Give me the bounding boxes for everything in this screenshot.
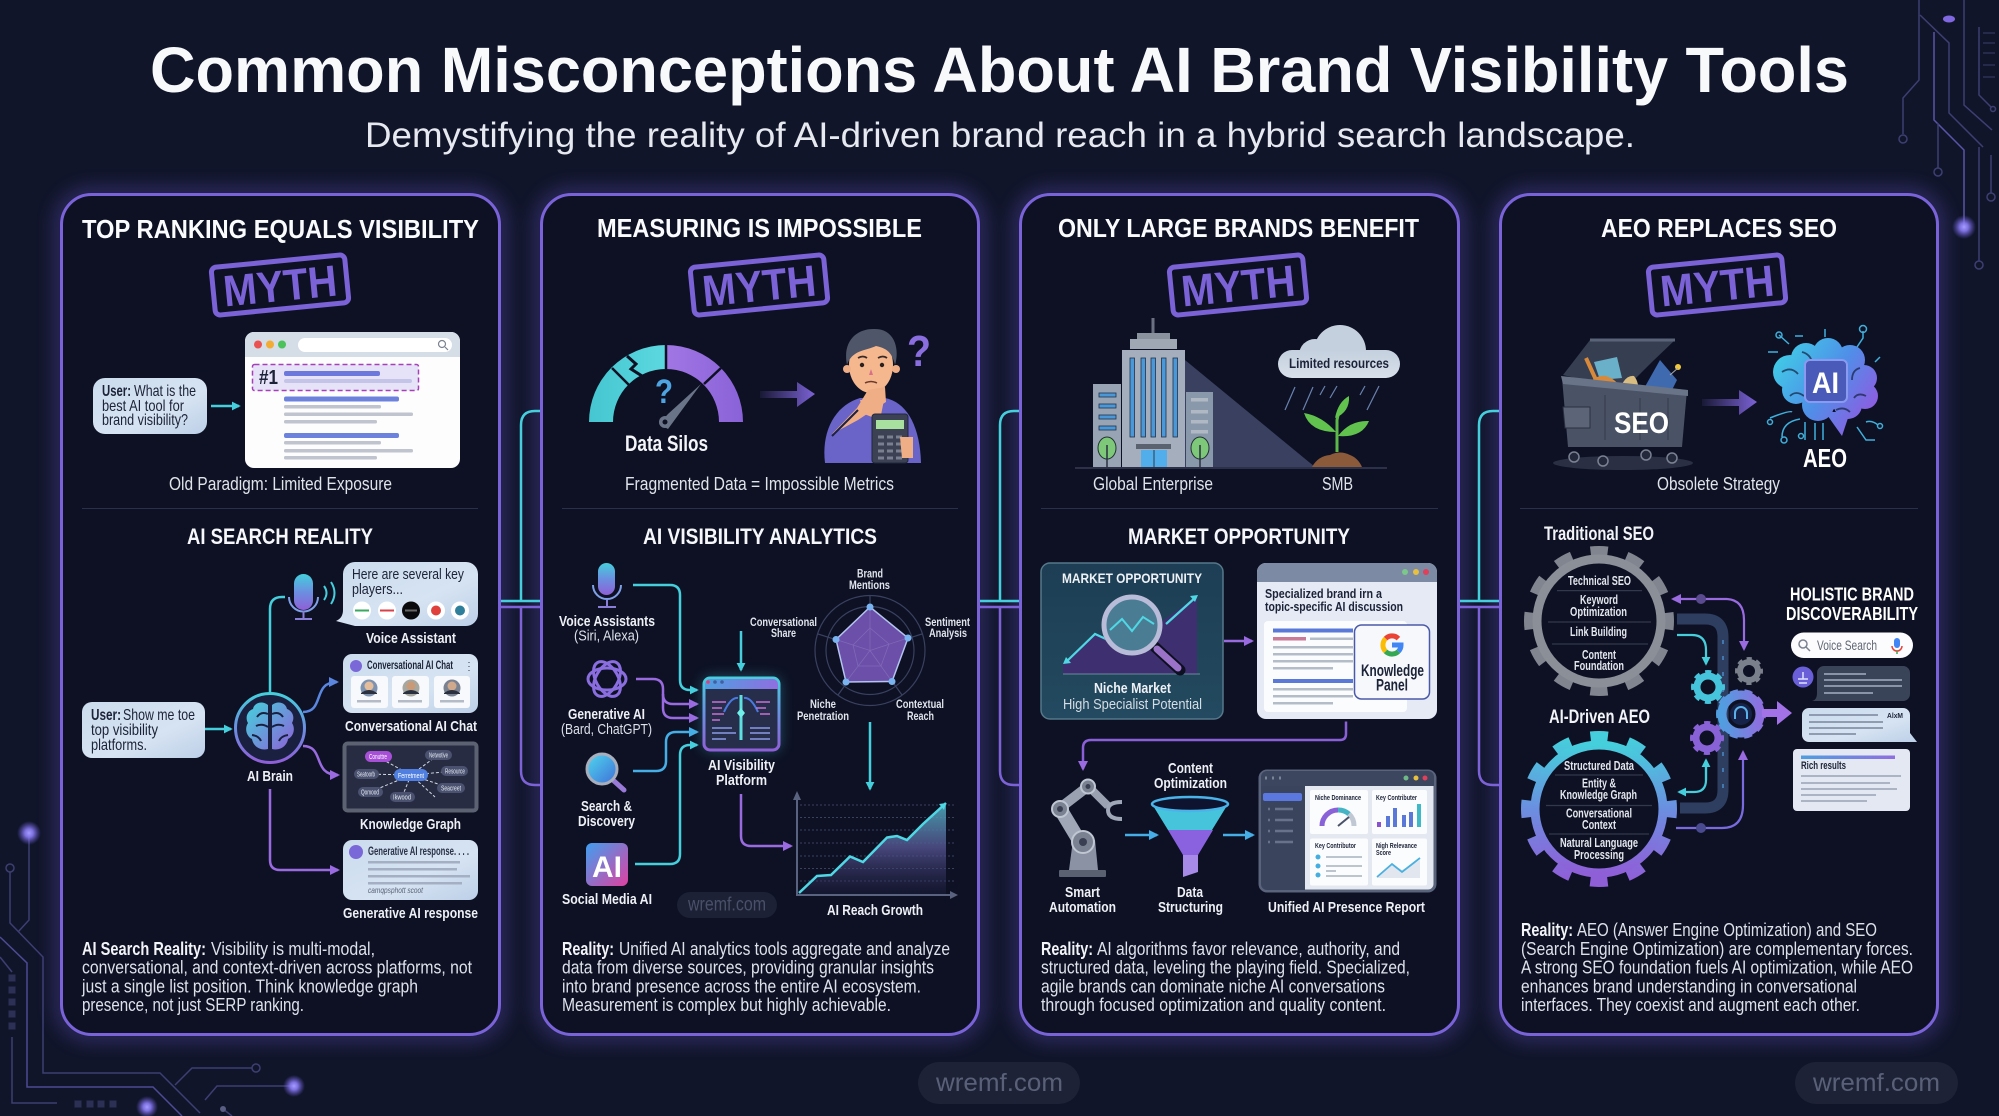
label: Discovery xyxy=(578,813,636,830)
label: Smart xyxy=(1065,884,1100,901)
rain xyxy=(1285,386,1379,410)
gear: AI-driven AEO xyxy=(1528,738,1670,880)
knowledge graph card: Ferretment xyxy=(398,773,424,780)
SEO dumpster: SEO xyxy=(1614,407,1669,440)
reality text: AI Search Reality: xyxy=(82,939,206,959)
small gears xyxy=(1692,659,1764,753)
gear: AI-driven AEO: Natural Language xyxy=(1560,835,1638,850)
radar labels: Share xyxy=(771,626,796,640)
AI discussion browser card xyxy=(1257,563,1437,719)
reality text: enhances brand understanding in conversational xyxy=(1521,976,1857,996)
heading: AEO REPLACES SEO xyxy=(1601,213,1837,243)
arrow xyxy=(1224,640,1252,642)
microphone icon xyxy=(593,563,621,607)
knowledge graph card: Ikwood xyxy=(393,794,411,802)
knowledge graph card: Conuttre xyxy=(369,754,387,761)
reality text: Reality: xyxy=(1521,920,1573,940)
knowledge graph card: Seacreet xyxy=(441,786,461,792)
connector to robot xyxy=(1083,722,1346,769)
robot arm xyxy=(1052,780,1122,877)
myth stamp: MYTH xyxy=(221,257,339,316)
sub heading: AI VISIBILITY ANALYTICS xyxy=(643,524,877,549)
arrow xyxy=(211,405,239,407)
heading: traditional SEO: Traditional SEO xyxy=(1544,524,1654,545)
reality text: into brand presence across the entire AI ecosystem. xyxy=(562,976,921,996)
label: Conversational AI Chat xyxy=(345,718,477,735)
conversational chat card xyxy=(343,654,478,713)
knowledge graph card: Qomood xyxy=(361,790,379,796)
panel: only large brands benefit xyxy=(1020,194,1458,1034)
arrows xyxy=(1125,834,1253,836)
assistant icon xyxy=(1792,666,1814,688)
gear: AI-driven AEO: Processing xyxy=(1574,847,1624,862)
confused person with calculator: ? xyxy=(907,327,931,376)
generative response card: Generative AI response. . . . xyxy=(368,844,469,858)
label xyxy=(1049,884,1116,916)
background circuit: top right xyxy=(1899,0,1996,269)
reality text: interfaces. They coexist and augment each other. xyxy=(1521,995,1860,1015)
SEO dumpster xyxy=(1553,340,1693,470)
user query bubble: Show me toe xyxy=(123,707,195,724)
label: (Siri, Alexa) xyxy=(574,628,639,644)
user query bubble xyxy=(82,702,205,758)
heading: holistic brand discoverability: DISCOVERABILITY xyxy=(1786,604,1918,624)
connector: panel 2 to 3 xyxy=(979,411,1020,785)
social AI tile xyxy=(586,843,628,886)
user bubble xyxy=(93,378,207,434)
radar labels: Contextual xyxy=(896,697,944,711)
reality text: data from diverse sources, providing granular insights xyxy=(562,958,934,978)
label: Voice Assistants xyxy=(559,613,655,630)
watermark pill: right xyxy=(1795,1062,1958,1104)
gear: traditional SEO: Content xyxy=(1582,647,1616,662)
label: Content xyxy=(1168,760,1213,777)
reality text: through focused optimization and quality content. xyxy=(1041,995,1386,1015)
reality text: AEO (Answer Engine Optimization) and SEO xyxy=(1577,920,1877,940)
funnel xyxy=(1152,797,1228,877)
label: AI Reach Growth xyxy=(827,902,923,919)
gear: traditional SEO: Keyword xyxy=(1580,592,1618,607)
label: AI Visibility xyxy=(708,757,776,774)
reality text xyxy=(1521,920,1913,1015)
confused person with calculator xyxy=(824,327,931,463)
label xyxy=(708,757,776,789)
AI discussion browser card: Specialized brand irn a xyxy=(1265,586,1383,601)
niche market card: Niche Market xyxy=(1094,680,1171,697)
watermark pill: center xyxy=(918,1062,1080,1104)
radar labels: Analysis xyxy=(929,626,967,640)
unified report dashboard: Niche Dominance xyxy=(1315,795,1361,802)
knowledge graph card: Seatoorb xyxy=(357,772,375,778)
large purple arrow xyxy=(1762,701,1792,725)
radar chart xyxy=(815,595,925,706)
user bubble: best AI tool for xyxy=(102,398,185,415)
label: (Bard, ChatGPT) xyxy=(561,721,652,738)
flow arrows xyxy=(1673,594,1744,833)
panel: measuring is impossible xyxy=(542,194,978,1034)
generative response card xyxy=(343,840,478,900)
light response bubble: AlxM xyxy=(1887,713,1903,720)
caption: Old Paradigm: Limited Exposure xyxy=(169,474,392,494)
radar labels: Mentions xyxy=(849,578,890,592)
background circuit: bottom left xyxy=(0,821,305,1116)
reality text: just a single list position. Think knowledge graph xyxy=(81,976,418,996)
AEO brain with AI chip xyxy=(1768,326,1882,443)
reality text: conversational, and context-driven across platforms, not xyxy=(82,958,472,978)
label: Social Media AI xyxy=(562,891,652,908)
niche market card: High Specialist Potential xyxy=(1063,696,1202,713)
connecting track xyxy=(1677,619,1723,808)
AI brain icon xyxy=(236,694,304,762)
label: Platform xyxy=(716,772,767,789)
gear: AI-driven AEO: Structured Data xyxy=(1564,758,1635,773)
reality text xyxy=(562,939,950,1015)
label: Automation xyxy=(1049,899,1116,916)
gear: AI-driven AEO: Context xyxy=(1582,817,1616,832)
label: AEO xyxy=(1803,443,1847,473)
dark response bubble xyxy=(1812,666,1910,701)
reality text xyxy=(1041,939,1410,1015)
user bubble: What is the xyxy=(134,383,196,400)
niche market card xyxy=(1041,563,1223,719)
gear: AI-driven AEO: Entity & xyxy=(1582,776,1616,790)
reality text: Unified AI analytics tools aggregate and analyze xyxy=(619,939,950,959)
niche market card: MARKET OPPORTUNITY xyxy=(1062,570,1203,586)
label xyxy=(1158,884,1223,916)
reality text: Measurement is complex but highly achievable. xyxy=(562,995,891,1015)
sprout xyxy=(1304,396,1369,467)
reality text: presence, not just SERP ranking. xyxy=(82,995,304,1015)
label xyxy=(561,706,652,738)
label: AI Brain xyxy=(247,768,293,785)
connector: panel 3 to 4 xyxy=(1459,411,1500,785)
arrows from brain xyxy=(270,597,338,870)
label: Voice Assistant xyxy=(366,630,456,647)
panel glows xyxy=(61,194,1938,1035)
radar labels: Sentiment xyxy=(925,615,970,629)
label: Data xyxy=(1177,884,1204,901)
sub heading: AI SEARCH REALITY xyxy=(187,524,373,549)
conversational chat card: Conversational AI Chat xyxy=(367,658,453,672)
gear: traditional SEO xyxy=(1530,552,1668,690)
reality text xyxy=(81,939,472,1015)
user query bubble: top visibility xyxy=(91,722,158,739)
source arrows xyxy=(633,585,870,864)
myth stamp: MYTH xyxy=(1179,257,1297,316)
unified report dashboard: Nigh Relevance xyxy=(1376,843,1417,850)
label: Structuring xyxy=(1158,899,1223,916)
heading: holistic brand discoverability xyxy=(1786,584,1918,624)
cloud: Limited resources xyxy=(1289,355,1389,371)
gear: traditional SEO: Optimization xyxy=(1570,604,1627,619)
label xyxy=(1154,760,1227,792)
user bubble: User: xyxy=(102,383,131,400)
label xyxy=(559,613,655,644)
knowledge panel xyxy=(1354,625,1430,699)
AI visibility platform dashboard xyxy=(703,677,780,751)
AEO brain with AI chip: AI xyxy=(1812,367,1839,400)
voice assistant bubble: Here are several key xyxy=(352,566,464,583)
gear: AI-driven AEO: Knowledge Graph xyxy=(1560,787,1637,802)
cloud xyxy=(1278,325,1400,378)
gear: AI-driven AEO: Conversational xyxy=(1566,806,1632,820)
radar labels: Penetration xyxy=(797,709,849,723)
light response bubble xyxy=(1802,708,1917,742)
voice assistant microphone xyxy=(289,574,334,619)
unified report dashboard: Key Contributor xyxy=(1315,843,1356,850)
captions xyxy=(1093,474,1353,494)
gear: traditional SEO: Foundation xyxy=(1574,658,1624,673)
reality text: agile brands can dominate niche AI conversations xyxy=(1041,976,1385,996)
user query bubble: User: xyxy=(91,707,121,724)
heading: holistic brand discoverability: HOLISTIC BRAND xyxy=(1790,584,1914,604)
title: Common Misconceptions About AI Brand Visibility Tools xyxy=(150,34,1849,106)
label: Data Silos xyxy=(625,431,708,456)
reality text: Reality: xyxy=(1041,939,1093,959)
voice search bar: Voice Search xyxy=(1817,637,1877,653)
gear: traditional SEO: Link Building xyxy=(1570,624,1627,639)
radar labels: Conversational xyxy=(750,615,817,629)
knowledge graph card xyxy=(344,744,476,810)
panel: top ranking equals visibility xyxy=(62,194,500,1034)
radar labels: Brand xyxy=(857,566,883,580)
knowledge panel: Panel xyxy=(1376,676,1408,694)
heading: AI-driven AEO: AI-Driven AEO xyxy=(1549,707,1650,728)
arrow xyxy=(1702,390,1757,415)
reality text: A strong SEO foundation fuels AI optimization, while AEO xyxy=(1521,958,1913,978)
broken gauge xyxy=(589,345,743,429)
gear: traditional SEO: Technical SEO xyxy=(1568,573,1631,588)
magnifier icon xyxy=(587,754,624,790)
voice assistant bubble: players... xyxy=(352,581,403,598)
user query bubble: platforms. xyxy=(91,737,147,754)
generative response card: camqpsphott scoot xyxy=(368,886,424,895)
reach growth chart xyxy=(793,791,958,899)
reality text: structured data, leveling the playing field. Specialized, xyxy=(1041,958,1410,978)
label xyxy=(578,798,636,830)
caption: Obsolete Strategy xyxy=(1657,474,1780,494)
AI discussion browser card: topic-specific AI discussion xyxy=(1265,599,1403,614)
voice search bar xyxy=(1791,632,1913,658)
watermark: wremf.com xyxy=(687,894,766,916)
watermark pill: center: wremf.com xyxy=(935,1069,1063,1097)
arrow xyxy=(205,728,231,730)
caption: Fragmented Data = Impossible Metrics xyxy=(625,474,894,494)
subtitle: Demystifying the reality of AI-driven brand reach in a hybrid search landscape. xyxy=(365,116,1635,155)
arrow xyxy=(760,382,815,407)
user bubble: brand visibility? xyxy=(102,412,188,429)
rich results card: Rich results xyxy=(1801,760,1846,772)
captions: SMB xyxy=(1322,474,1353,494)
knowledge graph card: Netwotive xyxy=(429,752,448,760)
unified report dashboard: Key Contributer xyxy=(1376,795,1417,802)
label: Unified AI Presence Report xyxy=(1268,899,1425,916)
heading: TOP RANKING EQUALS VISIBILITY xyxy=(82,214,479,244)
enterprise building with shadow xyxy=(1075,318,1387,468)
unified report dashboard: Score xyxy=(1376,850,1391,857)
reality text: Visibility is multi-modal, xyxy=(211,939,375,959)
search results browser xyxy=(245,332,460,468)
myth stamp: MYTH xyxy=(700,257,818,316)
sub heading: MARKET OPPORTUNITY xyxy=(1128,524,1350,549)
radar labels: Reach xyxy=(907,709,934,723)
reality text: (Search Engine Optimization) are complementary forces. xyxy=(1521,939,1913,959)
label: Search & xyxy=(581,798,632,815)
myth stamp: MYTH xyxy=(1658,257,1776,316)
knowledge graph card: Resource xyxy=(445,768,465,776)
unified report dashboard xyxy=(1260,771,1435,891)
panel: AEO replaces SEO xyxy=(1500,194,1938,1034)
captions: Global Enterprise xyxy=(1093,474,1213,494)
heading: ONLY LARGE BRANDS BENEFIT xyxy=(1058,213,1419,243)
reality text: AI algorithms favor relevance, authority, and xyxy=(1097,939,1400,959)
generative knot icon xyxy=(588,657,626,701)
radar labels xyxy=(750,566,970,723)
radar labels: Niche xyxy=(810,697,836,711)
knowledge panel: Knowledge xyxy=(1361,661,1424,680)
rich results card xyxy=(1793,749,1910,811)
watermark pill: right: wremf.com xyxy=(1812,1069,1940,1097)
watermark xyxy=(677,892,777,918)
broken gauge: ? xyxy=(655,373,673,411)
search results browser: #1 xyxy=(259,367,278,389)
label: Optimization xyxy=(1154,775,1227,792)
heading: MEASURING IS IMPOSSIBLE xyxy=(597,213,922,243)
label: Generative AI response xyxy=(343,905,478,922)
reality text: Reality: xyxy=(562,939,614,959)
voice assistant bubble xyxy=(336,562,478,626)
label: Generative AI xyxy=(568,706,645,723)
social AI tile: AI xyxy=(592,851,622,884)
connector: panel 1 to 2 xyxy=(500,411,541,785)
label: Knowledge Graph xyxy=(360,816,461,833)
